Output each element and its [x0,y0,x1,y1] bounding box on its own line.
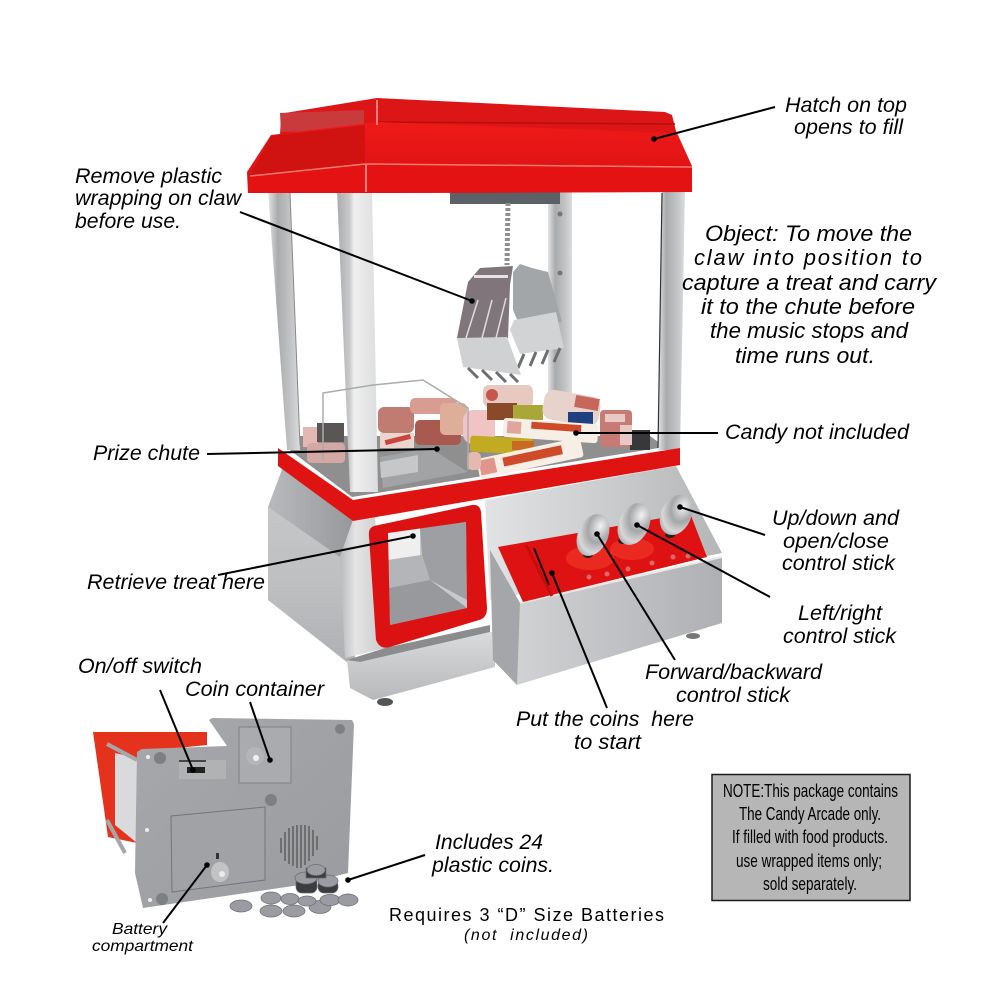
label: coin slot [516,570,694,754]
label: forward/backward control stick: Forward/backward [645,661,823,684]
stick stems [583,532,675,558]
base right panel [485,466,722,600]
door frame [369,505,487,648]
side glass [115,753,137,843]
red band [278,448,680,521]
left jaw [457,266,521,382]
label: includes coins [345,831,554,883]
note box: If filled with food products. [732,827,888,847]
back-right post [658,190,685,450]
label: forward/backward control stick [594,531,823,707]
text block: object of the game: the music stops and [710,318,909,343]
claw machine [247,98,722,706]
claw carriage [450,192,560,204]
text block: object of the game: capture a treat and carry [682,270,938,295]
label: includes coins: plastic coins. [431,854,554,877]
speaker grille [281,825,317,868]
label: on/off switch: On/off switch [78,655,202,678]
back-left post [268,190,300,450]
forward/backward knob [570,509,616,561]
prize door [369,505,487,648]
indicator lights [586,554,690,580]
label: battery compartment: Battery [112,921,168,938]
claw [457,264,564,382]
smarties roll back [502,418,599,443]
roof [247,98,692,193]
label: remove plastic wrapping: before use. [75,210,181,233]
label: coin container [185,678,325,763]
hatch [280,98,677,135]
label: up/down control stick [677,504,900,575]
label: hatch: opens to fill [794,116,904,139]
text block: object of the game: it to the chute before [701,294,915,319]
coins [230,864,358,917]
label: candy not included [573,421,910,444]
label: retrieve treat [87,533,416,594]
text block: object of the game: claw into position to [694,245,922,270]
console front [490,550,722,685]
label: remove plastic wrapping: Remove plastic [75,165,223,188]
foot right [686,633,700,639]
label: battery compartment [92,862,210,955]
label: includes coins: Includes 24 [435,831,543,854]
label: left/right control stick [634,522,898,648]
label: forward/backward control stick: control stick [676,684,792,707]
label: retrieve treat: Retrieve treat here [87,571,265,594]
battery requirement text: (not included) [464,927,588,944]
text block: object of the game: time runs out. [735,343,875,368]
text block: object of the game: Object: To move the [705,221,912,246]
label: on/off switch [78,655,202,773]
label: left/right control stick: Left/right [798,602,883,625]
battery requirement text: Requires 3 “D” Size Batteries [389,905,664,925]
left/right knob [611,498,657,550]
note box [712,774,910,900]
door opening [388,522,467,625]
control console [490,490,722,685]
note box: use wrapped items only; [736,851,882,871]
side posts [107,744,137,853]
right jaw [510,264,564,368]
up/down knob [654,490,698,540]
label: up/down control stick: Up/down and [772,507,900,530]
claw chain [507,203,508,265]
note box: sold separately. [763,874,857,894]
acrylic chute wall [323,380,468,470]
base front column [340,516,385,658]
battery requirement text [389,905,664,944]
back panel [135,718,354,908]
label: up/down control stick: open/close [783,530,889,553]
control stick bases [566,546,614,570]
chute opening [380,448,468,488]
foot left [377,698,393,706]
label: coin container: Coin container [185,678,325,701]
glass floor tray [287,436,665,497]
text block: object of the game [682,221,938,368]
label: left/right control stick: control stick [783,625,898,648]
label: battery compartment: compartment [92,938,194,955]
back centre post [548,190,572,395]
coin slot [534,548,549,585]
battery door [171,807,265,892]
label: hatch: Hatch on top [785,94,907,117]
label: prize chute: Prize chute [93,442,200,465]
back view of machine [93,718,358,917]
label: up/down control stick: control stick [782,552,897,575]
label: prize chute [93,442,440,465]
screw details [145,724,345,905]
label: remove plastic wrapping [75,165,475,304]
label: coin slot: Put the coins here [516,708,694,731]
base left upper shade [268,467,353,557]
label: candy not included: Candy not included [725,421,910,444]
red roof seen from back [93,732,207,843]
label: coin slot: to start [574,731,642,754]
base left side [268,467,355,665]
coin door [239,727,291,783]
smarties roll front [476,437,584,479]
label: hatch [651,94,907,142]
base plinth [347,625,495,700]
roof slope [247,122,692,193]
label: remove plastic wrapping: wrapping on claw [75,187,243,210]
front-left post [337,190,378,492]
switch [179,760,226,779]
console red top [498,513,707,602]
candy pile [303,385,650,479]
note box: The Candy Arcade only. [739,804,881,824]
note box: NOTE:This package contains [723,781,898,801]
